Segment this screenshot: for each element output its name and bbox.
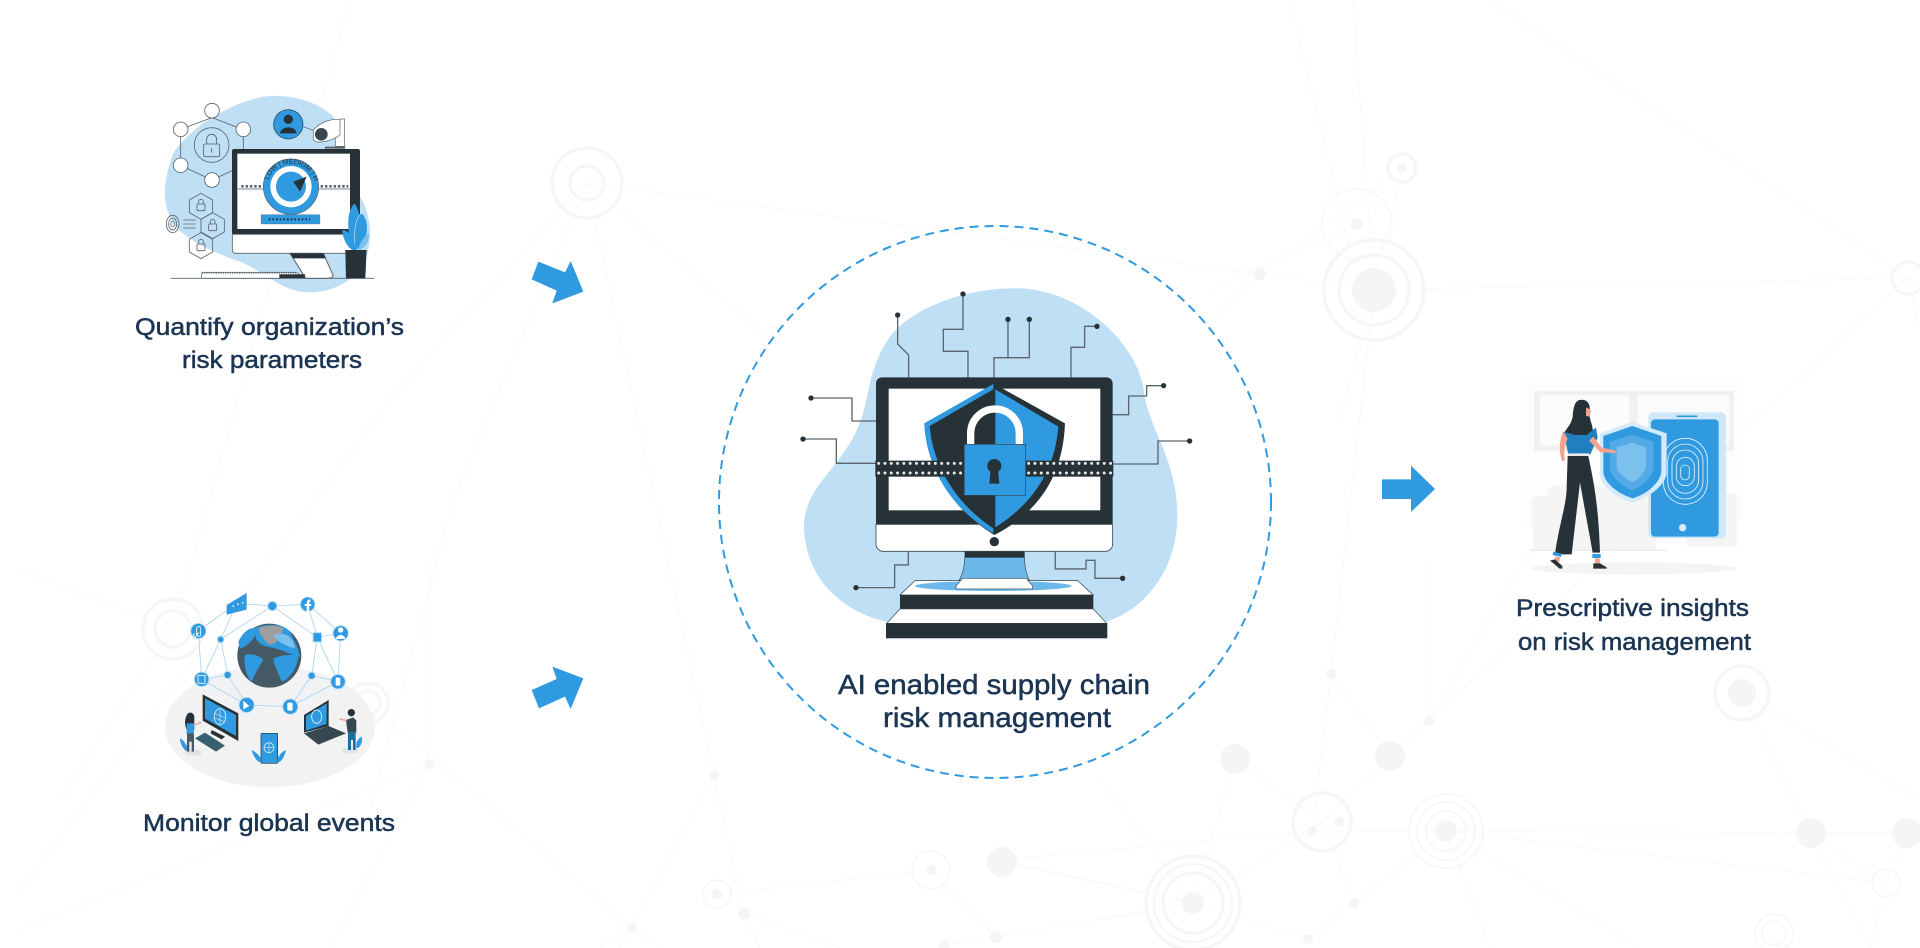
label: insights: Prescriptive insights	[1516, 595, 1749, 622]
illustration: secured monitor	[800, 288, 1192, 638]
panel: AI enabled supply chain risk management	[719, 226, 1271, 778]
arrow: quantify to centre	[532, 261, 583, 303]
panel: monitor global events	[143, 593, 395, 837]
label: insights	[1516, 595, 1751, 656]
panel: quantify risk parameters	[135, 96, 404, 374]
panel: prescriptive insights	[1516, 379, 1751, 656]
illustration: globe and devices	[165, 593, 375, 787]
arrow: centre to insights	[1382, 466, 1435, 512]
arrow: monitor to centre	[532, 667, 583, 709]
label: quantify: risk parameters	[182, 347, 362, 374]
label: insights: on risk management	[1518, 629, 1751, 656]
label: centre title: AI enabled supply chain	[838, 669, 1150, 700]
label: monitor: Monitor global events	[143, 810, 395, 837]
dashed circle	[719, 226, 1271, 778]
label: centre title	[838, 669, 1150, 733]
label: quantify: Quantify organization’s	[135, 314, 404, 341]
label: quantify	[135, 314, 404, 374]
illustration: risk monitor	[165, 96, 374, 292]
illustration: risk monitor: LOW | MEDIUM | HIGH	[264, 159, 318, 181]
label: centre title: risk management	[883, 702, 1111, 733]
illustration: woman, shield and phone	[1523, 379, 1743, 574]
